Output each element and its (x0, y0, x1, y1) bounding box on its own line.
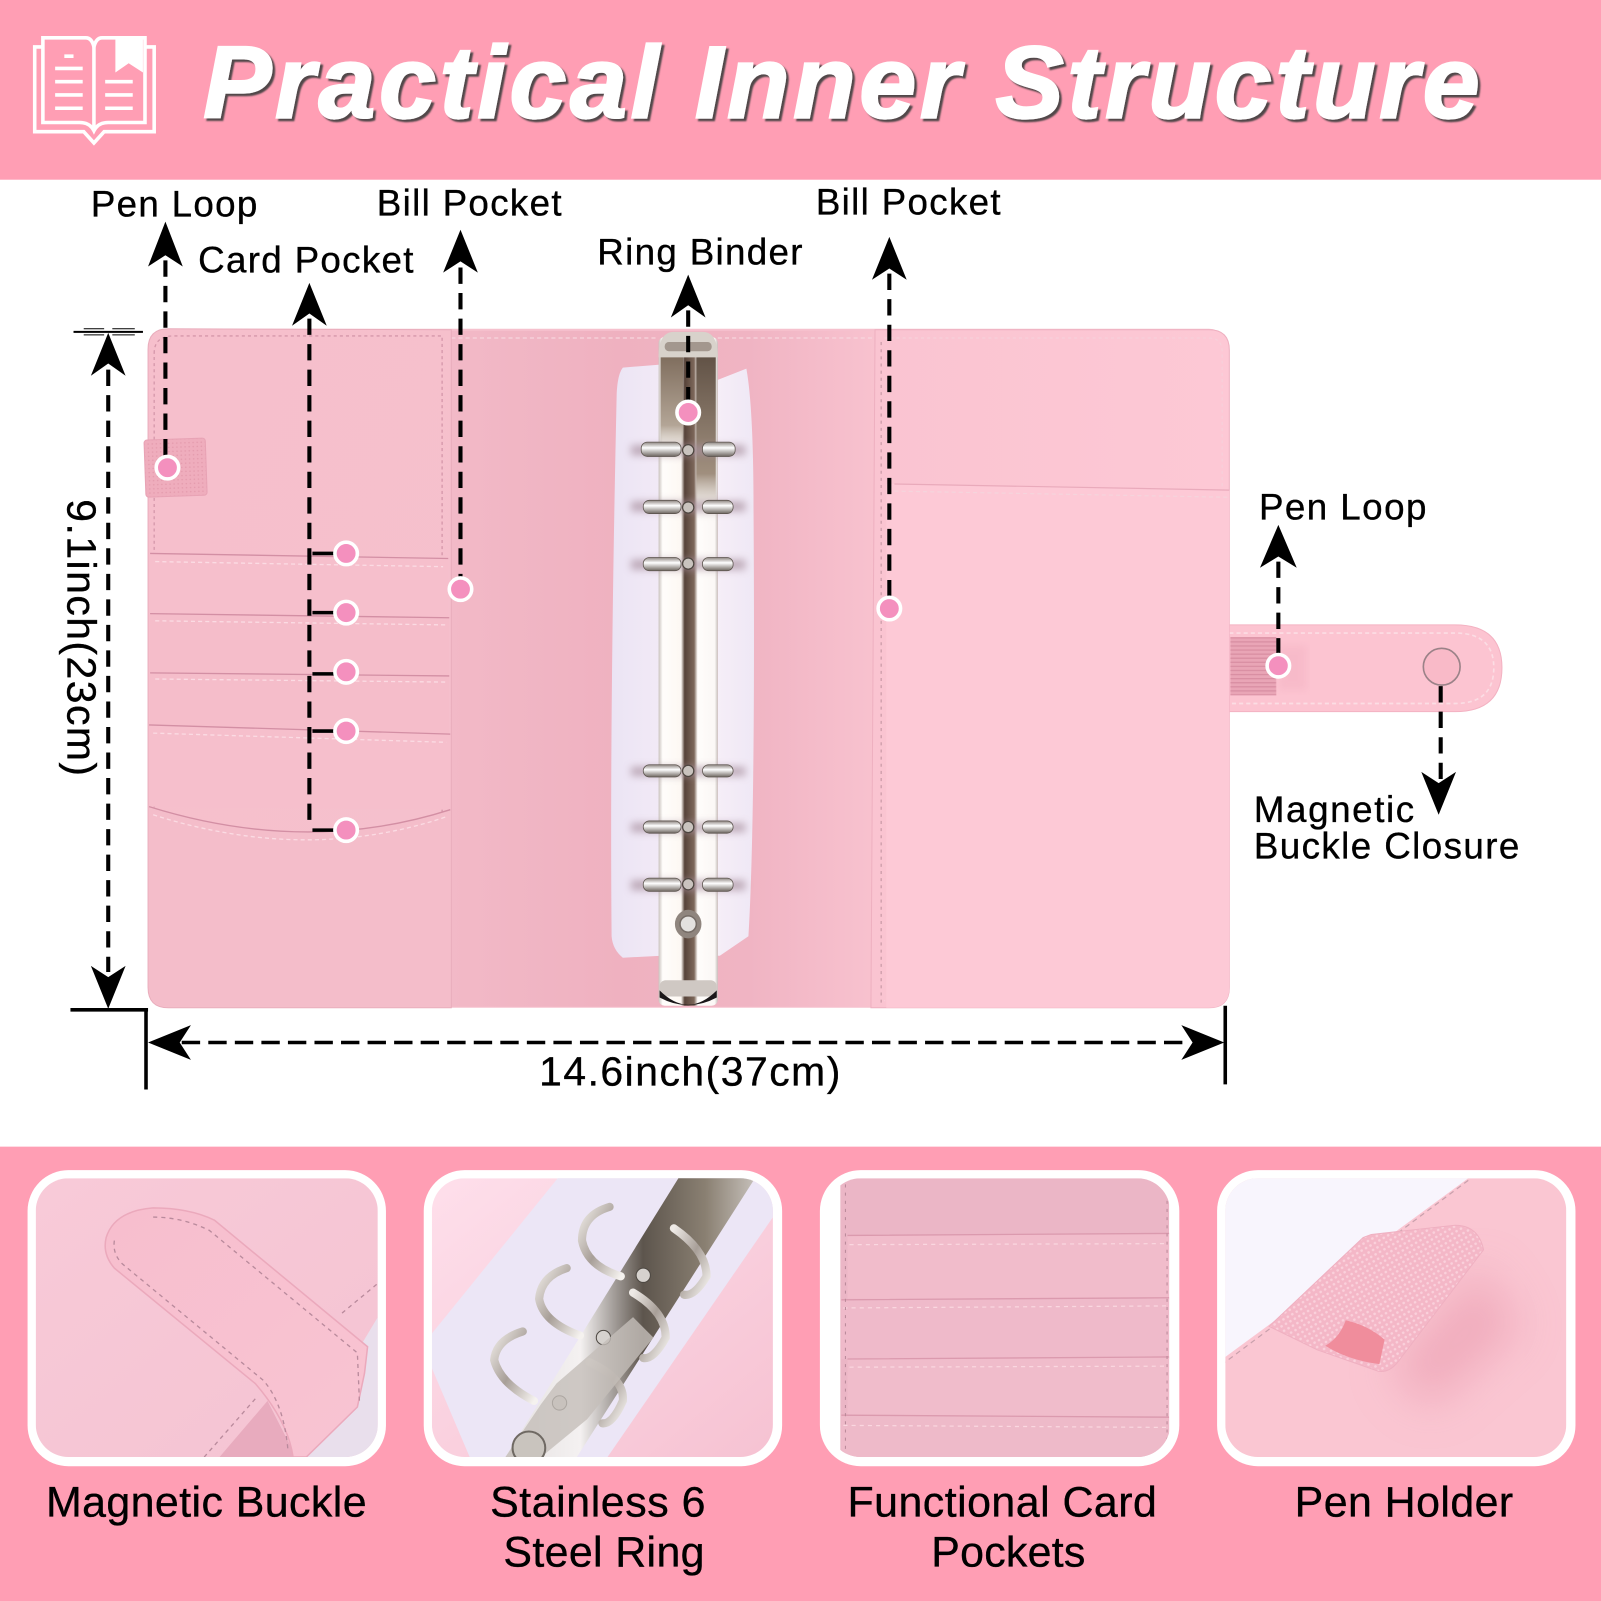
icon: open book (35, 38, 154, 143)
binder cover (148, 329, 1229, 1008)
caption: stainless steel ring (490, 1478, 706, 1576)
binder photo (144, 329, 1502, 1008)
middle panel (449, 331, 876, 1007)
callout: magnetic buckle closure (1254, 686, 1519, 867)
width dimension (148, 1006, 1225, 1094)
callout: bill pocket right (816, 181, 1001, 620)
caption: pen holder: Pen Holder (1295, 1478, 1513, 1526)
metal ring binder spine (659, 332, 718, 1006)
width dimension: 14.6inch(37cm) (539, 1048, 840, 1094)
callout: card pocket (198, 240, 414, 841)
caption: functional card pockets: Functional Card (847, 1478, 1157, 1526)
header banner (0, 0, 1601, 180)
left panel with card slots (144, 329, 451, 1008)
caption: functional card pockets (847, 1478, 1157, 1576)
caption: magnetic buckle: Magnetic Buckle (46, 1478, 367, 1526)
callout: bill pocket right: Bill Pocket (816, 181, 1001, 222)
bottom feature band (0, 1147, 1601, 1601)
callout: pen loop right (1259, 487, 1426, 677)
callout: pen loop left (91, 183, 257, 479)
panel: stainless rings (424, 1170, 782, 1466)
callout: bill pocket left: Bill Pocket (377, 182, 562, 223)
six binder rings (631, 442, 745, 891)
panel: card pockets (820, 1170, 1179, 1466)
callout: pen loop right: Pen Loop (1259, 487, 1426, 528)
callout: bill pocket left (377, 182, 562, 600)
height dimension: 9.1inch(23cm) (58, 499, 104, 776)
bill pocket (886, 484, 1229, 1008)
panel: pen holder (1217, 1170, 1575, 1466)
caption: functional card pockets: Pockets (931, 1528, 1085, 1576)
title: Practical Inner Structure (203, 25, 1479, 139)
callout: magnetic buckle closure: Magnetic (1254, 789, 1414, 830)
magnetic button (1423, 648, 1460, 685)
binder strap with magnetic buckle (1220, 625, 1502, 712)
callout: card pocket: Card Pocket (198, 240, 414, 281)
callout: ring binder: Ring Binder (597, 231, 803, 272)
callout: magnetic buckle closure: Buckle Closure (1254, 826, 1519, 867)
paper divider (611, 365, 754, 958)
caption: stainless steel ring: Stainless 6 (490, 1478, 706, 1526)
callout: ring binder (597, 231, 803, 424)
callout: pen loop left: Pen Loop (91, 183, 257, 224)
card slots (149, 553, 450, 1007)
height dimension (58, 329, 148, 1089)
elastic pen loop (144, 438, 207, 497)
panel: magnetic buckle (28, 1170, 386, 1466)
right panel with bill pocket (871, 330, 1229, 1008)
caption: stainless steel ring: Steel Ring (503, 1528, 705, 1576)
